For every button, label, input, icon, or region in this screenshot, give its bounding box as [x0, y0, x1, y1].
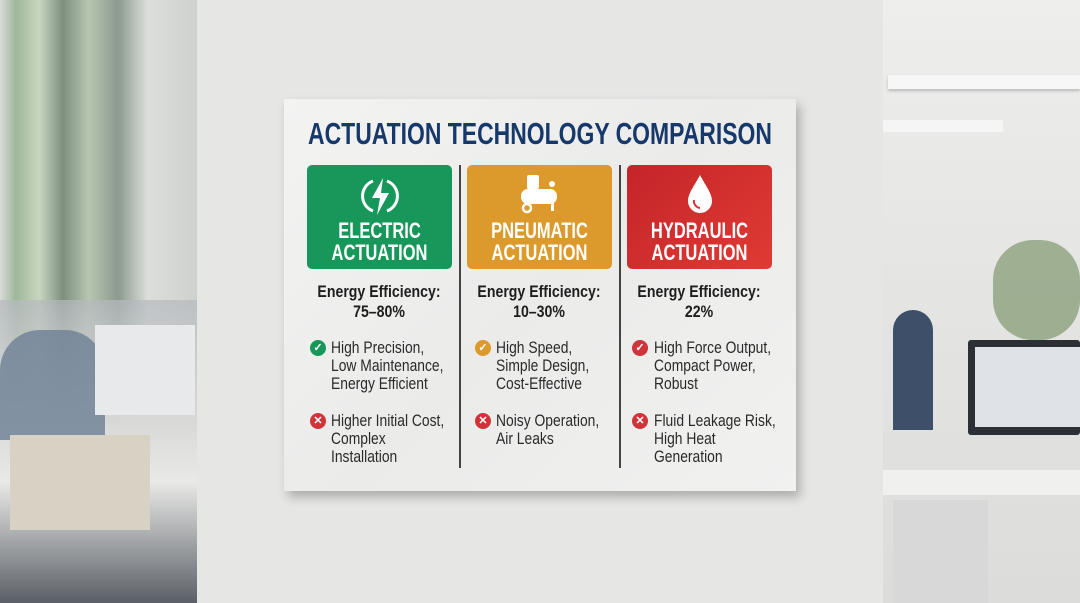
electric header box [307, 165, 452, 269]
panel: electric [307, 165, 452, 466]
hydraulic cons: ✕ [635, 415, 645, 427]
pneumatic cons: Air Leaks [496, 430, 554, 448]
electric pros: High Precision, [331, 339, 424, 357]
pneumatic header box: ACTUATION [492, 240, 587, 265]
pneumatic header box [467, 165, 612, 269]
panel: hydraulic [627, 165, 776, 466]
hydraulic cons [632, 412, 776, 466]
electric efficiency [317, 282, 441, 321]
electric pros: Energy Efficient [331, 375, 428, 393]
pneumatic pros: Cost-Effective [496, 375, 582, 393]
pneumatic pros: Simple Design, [496, 357, 589, 375]
electric pros: ✓ [313, 342, 323, 354]
electric header box: ACTUATION [332, 240, 427, 265]
pneumatic efficiency [477, 282, 601, 321]
electric pros [310, 339, 443, 393]
hydraulic pros: ✓ [635, 342, 645, 354]
background: left office [0, 0, 197, 603]
panel: pneumatic [467, 165, 612, 448]
pneumatic cons: Noisy Operation, [496, 412, 599, 430]
hydraulic cons: High Heat [654, 430, 716, 448]
hydraulic header box: ACTUATION [652, 240, 747, 265]
background: right office [883, 0, 1080, 603]
electric header box: ELECTRIC [338, 218, 421, 243]
hydraulic pros: High Force Output, [654, 339, 771, 357]
hydraulic cons: Generation [654, 448, 723, 466]
hydraulic header box [627, 165, 772, 269]
hydraulic efficiency [637, 282, 761, 321]
icon: lightning [361, 178, 399, 215]
pneumatic pros: High Speed, [496, 339, 572, 357]
hydraulic pros: Robust [654, 375, 698, 393]
pneumatic cons [475, 412, 599, 448]
pneumatic pros [475, 339, 589, 393]
electric cons: Higher Initial Cost, [331, 412, 444, 430]
electric pros: Low Maintenance, [331, 357, 443, 375]
hydraulic pros: Compact Power, [654, 357, 756, 375]
hydraulic header box: HYDRAULIC [651, 218, 748, 243]
pneumatic cons: ✕ [478, 415, 488, 427]
electric cons [310, 412, 444, 466]
pneumatic efficiency: Energy Efficiency: [477, 282, 601, 301]
electric efficiency: 75–80% [353, 302, 405, 321]
icon: compressor [521, 175, 557, 214]
pneumatic efficiency: 10–30% [513, 302, 565, 321]
hydraulic cons: Fluid Leakage Risk, [654, 412, 776, 430]
title: ACTUATION TECHNOLOGY COMPARISON [308, 116, 772, 151]
icon: drop [688, 175, 712, 213]
hydraulic pros [632, 339, 771, 393]
hydraulic efficiency: Energy Efficiency: [637, 282, 761, 301]
pneumatic header box: PNEUMATIC [491, 218, 588, 243]
pneumatic pros: ✓ [478, 342, 488, 354]
panel: sign [284, 99, 796, 491]
electric efficiency: Energy Efficiency: [317, 282, 441, 301]
electric cons: Installation [331, 448, 397, 466]
electric cons: Complex [331, 430, 386, 448]
electric cons: ✕ [313, 415, 323, 427]
hydraulic efficiency: 22% [685, 302, 713, 321]
